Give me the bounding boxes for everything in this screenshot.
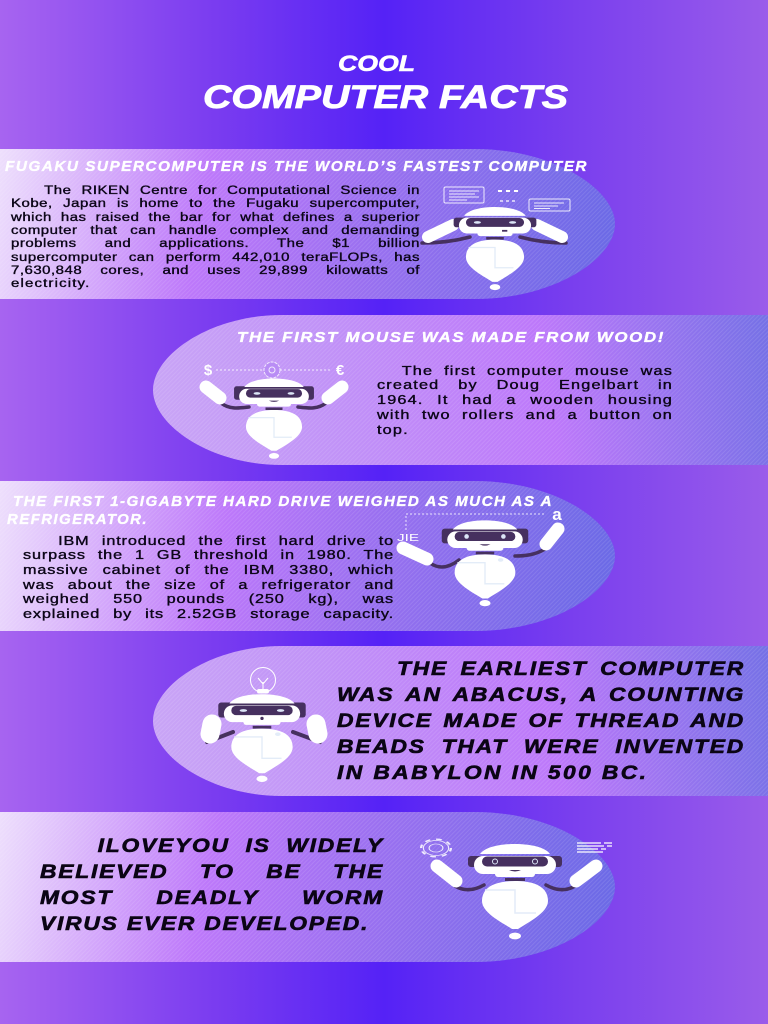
text block: Kobe, Japan is home to the Fugaku supercomputer, <box>11 198 420 210</box>
title line: computer facts: COMPUTER FACTS <box>203 79 569 115</box>
text block <box>337 658 745 784</box>
text block: 7,630,848 cores, and uses 29,899 kilowatts of <box>11 265 420 277</box>
robot: waving with letters: a <box>552 505 562 524</box>
panel: first 1GB hard drive <box>0 481 615 631</box>
heading: THE FIRST 1-GIGABYTE HARD DRIVE WEIGHED AS MUCH AS A <box>13 494 553 510</box>
text block: IN BABYLON IN 500 BC. <box>337 762 648 784</box>
text block: 1964. It had a wooden housing <box>377 393 673 407</box>
robot: idea light bulb <box>207 668 320 782</box>
robot: gear and code lines <box>421 839 612 939</box>
text block: ILOVEYOU IS WIDELY <box>98 836 384 857</box>
heading <box>7 494 553 528</box>
panel: first mouse <box>153 315 768 465</box>
text block: which has raised the bar for what defines a superior <box>11 212 420 224</box>
text block: IBM introduced the first hard drive to <box>58 534 394 548</box>
text block: The first computer mouse was <box>402 364 673 378</box>
text block: WAS AN ABACUS, A COUNTING <box>337 684 745 706</box>
title line: cool: COOL <box>338 51 415 76</box>
text block: top. <box>377 423 409 437</box>
title <box>203 51 569 115</box>
heading: REFRIGERATOR. <box>7 512 148 528</box>
heading: FUGAKU SUPERCOMPUTER IS THE WORLD’S FASTEST COMPUTER <box>5 159 588 175</box>
text block: explained by its 2.52GB storage capacity. <box>23 607 394 621</box>
panel: ILOVEYOU <box>0 812 615 962</box>
text block <box>10 185 420 290</box>
text block: surpass the 1 GB threshold in 1980. The <box>23 548 394 562</box>
text block: problems and applications. The $1 billion <box>11 238 420 250</box>
robot: arms raised with currency symbols: € <box>336 362 345 379</box>
text block: was about the size of a refrigerator and <box>23 578 394 592</box>
text block: computer that can handle complex and demanding <box>11 225 420 237</box>
text block: massive cabinet of the IBM 3380, which <box>23 563 394 577</box>
text block: BEADS THAT WERE INVENTED <box>337 736 745 758</box>
panel: earliest computer <box>153 646 768 796</box>
text block: supercomputer can perform 442,010 teraFLOPs, has <box>11 252 420 264</box>
text block: with two rollers and a button on <box>377 408 673 422</box>
text block: weighed 550 pounds (250 kg), was <box>23 592 394 606</box>
panel: Fugaku supercomputer <box>0 149 615 299</box>
heading: THE FIRST MOUSE WAS MADE FROM WOOD! <box>237 330 665 346</box>
text block <box>22 534 394 621</box>
text block <box>376 364 673 437</box>
text block: THE EARLIEST COMPUTER <box>397 658 745 680</box>
robot: arms raised with currency symbols <box>204 362 345 459</box>
text block <box>40 836 385 935</box>
robot: hands on head with data cards <box>422 187 570 290</box>
robot: arms raised with currency symbols: $ <box>204 362 213 379</box>
text block: MOST DEADLY WORM <box>40 888 384 909</box>
text block: The RIKEN Centre for Computational Science in <box>44 185 420 197</box>
text block: created by Doug Engelbart in <box>377 378 673 392</box>
robot: waving with letters <box>397 505 562 606</box>
text block: BELIEVED TO BE THE <box>40 862 384 883</box>
text block: VIRUS EVER DEVELOPED. <box>40 914 369 935</box>
text block: electricity. <box>11 278 90 290</box>
text block: DEVICE MADE OF THREAD AND <box>337 710 745 732</box>
robot: waving with letters: JIE <box>397 533 419 544</box>
